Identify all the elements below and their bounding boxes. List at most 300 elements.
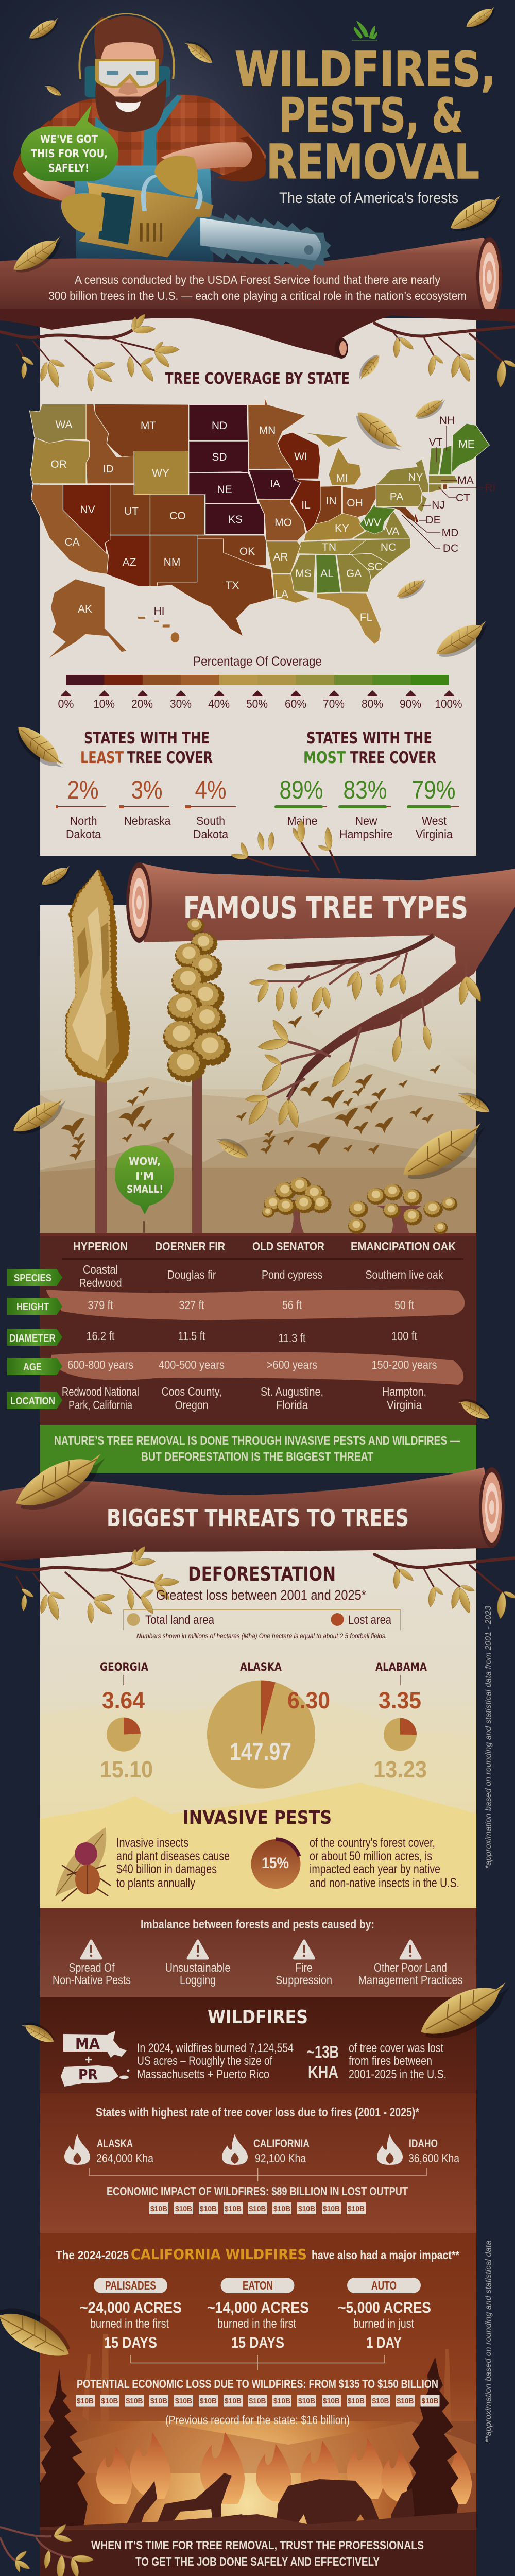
- $10B tiles: $10B: [348, 2205, 365, 2213]
- speech bubble: we've got this: [21, 105, 118, 181]
- column headers: EMANCIPATION OAK: [351, 1240, 456, 1253]
- panel: California wildfires: [40, 2233, 476, 2532]
- map state labels: SD: [212, 451, 227, 463]
- icon: leaf: [454, 1087, 493, 1117]
- map state labels: MT: [141, 420, 156, 432]
- icon: leaf: [8, 231, 69, 280]
- mountain layers: [40, 1026, 476, 1233]
- nose: [118, 83, 138, 95]
- tree: Hyperion: [67, 872, 128, 1233]
- state names: Dakota: [193, 827, 228, 841]
- log underside branches: [0, 309, 515, 358]
- icon: leaf: [350, 405, 408, 460]
- fire pill: Eaton: EATON: [243, 2279, 273, 2292]
- map state labels: MN: [259, 425, 276, 436]
- icon: leaf: [394, 574, 430, 603]
- fire pill: Palisades: PALISADES: [105, 2279, 156, 2292]
- chain teeth: [210, 213, 331, 271]
- icon: plant logo: [352, 21, 377, 40]
- map state labels: MO: [274, 517, 292, 529]
- $10B tiles: $10B: [77, 2397, 94, 2405]
- stat values: 2%: [67, 775, 99, 804]
- map outside labels: [153, 415, 495, 617]
- tree cover lost text: of tree cover was lost: [349, 2041, 443, 2055]
- twigs above log: [231, 820, 340, 873]
- states heading: States with highest rate of tree cover loss due to fires (2001 - 2025)*: [96, 2106, 420, 2120]
- table cells: Coastal: [83, 1263, 118, 1276]
- panel: imbalance causes: [40, 1908, 476, 1997]
- speech bubble: wow, I'm small: I'M: [135, 1170, 154, 1182]
- state names: New: [355, 814, 377, 827]
- map state labels: IL: [301, 499, 311, 511]
- heading: least: STATES WITH THE: [84, 729, 210, 748]
- panel: states with highest loss: [40, 2093, 476, 2233]
- legend tick labels: 60%: [285, 697, 306, 710]
- map outside labels: HI: [153, 605, 165, 617]
- stat values: 83%: [343, 775, 387, 804]
- wildfire acreage text: US acres – Roughly the size of: [137, 2054, 272, 2068]
- text: invasive insects: to plants annually: [116, 1876, 195, 1890]
- cause labels: Spread Of: [69, 1961, 115, 1974]
- table cells: 100 ft: [391, 1329, 418, 1343]
- title: [235, 42, 496, 190]
- fire acreage stats: 15 DAYS: [104, 2334, 157, 2351]
- map outside labels: DC: [443, 543, 458, 554]
- fire pill: Eaton: [220, 2278, 295, 2293]
- table cells: [62, 1263, 443, 1412]
- imbalance heading: Imbalance between forests and pests caused by:: [141, 1918, 374, 1931]
- map state labels: WY: [152, 467, 169, 479]
- table cells: Redwood National: [62, 1385, 139, 1398]
- most tree cover stats: [276, 729, 459, 841]
- least tree cover stats: [56, 729, 236, 841]
- map leader lines: [402, 426, 485, 548]
- icon: leaf: [39, 862, 75, 890]
- map outside labels: MD: [442, 527, 458, 539]
- shirt plaid: [49, 95, 266, 197]
- twig at left of log: [0, 2523, 94, 2576]
- table cells: 400-500 years: [159, 1358, 225, 1371]
- legend tick labels: 30%: [170, 697, 192, 710]
- fire pill: Auto: AUTO: [371, 2279, 397, 2292]
- hair: [94, 16, 164, 65]
- map state labels: WI: [294, 451, 307, 463]
- map state labels: IN: [325, 495, 337, 507]
- icon: leaf: [445, 189, 509, 239]
- mouth: [116, 101, 141, 112]
- text: invasive insects: and plant diseases cause: [116, 1849, 230, 1863]
- $10B tiles: $10B: [249, 2397, 266, 2405]
- text: invasive insects: Invasive insects: [116, 1836, 188, 1850]
- legend tick labels: 80%: [362, 697, 383, 710]
- goggles: [97, 60, 157, 87]
- table cells: Hampton,: [382, 1385, 426, 1398]
- map outside labels: DE: [425, 514, 441, 526]
- left twigs: [0, 1545, 179, 1623]
- icon: leaf: [431, 615, 495, 665]
- $10B tiles: $10B: [150, 2205, 167, 2213]
- text: forest cover: and non-native insects in the U.S.: [310, 1876, 459, 1890]
- log title: BIGGEST THREATS TO TREES: [107, 1504, 409, 1532]
- map state labels: NY: [408, 471, 423, 483]
- pie: Georgia: 3.64: [102, 1687, 145, 1714]
- map state labels: GA: [346, 568, 362, 580]
- map state labels: AK: [78, 603, 92, 615]
- faint background trees: [82, 2334, 451, 2432]
- table cells: Virginia: [387, 1398, 422, 1412]
- column headers: HYPERION: [73, 1240, 128, 1253]
- table background: [40, 1236, 476, 1425]
- row tags: DIAMETER: [9, 1333, 56, 1344]
- branch cut end: [335, 338, 348, 359]
- footnote: approximation: **approximation based on rounding and statistical data: [484, 2241, 493, 2443]
- elk: [154, 2473, 232, 2530]
- legend tick labels: 40%: [208, 697, 230, 710]
- title: REMOVAL: [266, 134, 479, 190]
- $10B tiles: $10B: [323, 2397, 340, 2405]
- tree: Old Senator: [263, 1178, 331, 1233]
- intro text: [48, 273, 467, 302]
- map state labels: NE: [217, 484, 232, 496]
- row tags: LOCATION: [10, 1396, 55, 1407]
- table cells: 379 ft: [88, 1298, 113, 1312]
- most tree cover stats: TREE COVER: [350, 749, 436, 767]
- left forearm: [23, 167, 82, 203]
- saw vents: [141, 223, 161, 242]
- flame icons: [64, 2134, 403, 2165]
- callout: trust the professionals: TO GET THE JOB DONE SAFELY AND EFFECTIVELY: [135, 2555, 380, 2568]
- background hills: [40, 1700, 476, 1908]
- row tags: [7, 1269, 62, 1409]
- map outside labels: MA: [457, 474, 474, 486]
- stat values: [279, 775, 455, 804]
- $10B tiles: $10B: [372, 2397, 389, 2405]
- log cut end: [476, 237, 502, 317]
- face: [98, 42, 158, 98]
- $10B tiles: $10B: [175, 2397, 192, 2405]
- pie: Alabama: [373, 1661, 427, 1783]
- $10B tiles: $10B: [348, 2397, 365, 2405]
- warning icons: [81, 1941, 420, 1958]
- bubble text: WOW,: [129, 1155, 161, 1167]
- map state labels: ND: [212, 420, 227, 432]
- deer: [124, 2481, 157, 2530]
- column headers: OLD SENATOR: [252, 1240, 324, 1253]
- section heading: tree coverage: TREE COVERAGE BY STATE: [165, 370, 350, 388]
- table cells: 50 ft: [394, 1298, 415, 1312]
- stat: 13B kha: [307, 2042, 339, 2081]
- map state labels: CA: [64, 536, 80, 548]
- shirt: [49, 95, 266, 197]
- $10B tiles: $10B: [421, 2397, 439, 2405]
- heading: most: STATES WITH THE: [306, 729, 432, 748]
- icon: leaf: [414, 1972, 515, 2050]
- pie: Alaska: 6.30: [287, 1687, 330, 1714]
- icon: leaf: [354, 351, 383, 383]
- pie: Alaska: [207, 1661, 330, 1789]
- tiny person for scale: [143, 1221, 145, 1233]
- cause labels: Unsustainable: [165, 1961, 231, 1974]
- legend ticks: [60, 690, 455, 696]
- table cells: 56 ft: [282, 1298, 302, 1312]
- $10B tiles: $10B: [126, 2397, 143, 2405]
- guide bar: [200, 218, 321, 261]
- icon: leaf: [8, 1092, 72, 1142]
- tree cover lost text: from fires between: [349, 2054, 432, 2068]
- table cells: 16.2 ft: [87, 1329, 115, 1343]
- cause labels: Other Poor Land: [374, 1961, 447, 1974]
- legend colour bar: [66, 675, 449, 685]
- choropleth map of US states: [29, 397, 489, 658]
- state names: North: [70, 814, 97, 827]
- legend tick labels: 20%: [131, 697, 153, 710]
- previous record note: (Previous record for the state: $16 billion): [165, 2413, 350, 2427]
- map state labels: AL: [320, 568, 334, 580]
- bracket: [89, 2168, 426, 2181]
- fire acreage stats: ~5,000 ACRES: [338, 2299, 431, 2316]
- tree cover lost text: [349, 2041, 447, 2081]
- icon: leaf: [10, 720, 70, 777]
- map state labels: AR: [273, 551, 288, 563]
- fire acreage stats: [80, 2299, 431, 2351]
- table cells: Oregon: [175, 1398, 208, 1412]
- row tags: AGE: [23, 1362, 42, 1373]
- $10B tiles: $10B: [298, 2397, 315, 2405]
- icon: leaf: [454, 1393, 493, 1423]
- cause labels: Non-Native Pests: [53, 1973, 131, 1987]
- birds: [61, 1010, 440, 1161]
- tree cover lost text: 2001-2025 in the U.S.: [349, 2067, 447, 2081]
- $10B tiles: $10B: [200, 2397, 217, 2405]
- $10B tiles: $10B: [298, 2205, 315, 2213]
- donut stat: 15%: [251, 1839, 301, 1889]
- ground line: [40, 1233, 476, 1237]
- fire acreage stats: ~14,000 ACRES: [207, 2299, 309, 2316]
- right forearm: [161, 142, 255, 170]
- text: forest cover: [310, 1836, 459, 1890]
- table cells: Southern live oak: [366, 1268, 443, 1281]
- panel: famous tree types scene: [40, 905, 476, 1233]
- fire acreage stats: 1 DAY: [366, 2334, 402, 2351]
- callout: trust the professionals: WHEN IT’S TIME FOR TREE REMOVAL, TRUST THE PROFESSIONALS: [91, 2538, 424, 2552]
- map state labels: MI: [336, 472, 348, 484]
- map state labels: UT: [124, 505, 139, 517]
- right twigs: [374, 323, 515, 388]
- map state labels: OR: [50, 459, 67, 470]
- icon: leaf: [43, 81, 63, 98]
- bubble text: WE'VE GOT: [40, 133, 98, 145]
- map state labels: NM: [164, 556, 180, 568]
- bar sprocket: [304, 245, 313, 255]
- table cells: Pond cypress: [262, 1268, 322, 1281]
- log and big branch: [140, 862, 515, 1097]
- $10B tiles: $10B: [175, 2205, 192, 2213]
- bubble tail: [72, 105, 99, 130]
- map state labels: [50, 419, 475, 623]
- tree: Emancipation Oak: [349, 1185, 457, 1233]
- legend tick labels: 10%: [93, 697, 115, 710]
- bubble body: [21, 126, 118, 181]
- table cells: >600 years: [267, 1358, 317, 1371]
- pie: Alaska: ALASKA: [240, 1661, 282, 1674]
- state names: South: [196, 814, 225, 827]
- saw handle: [143, 176, 200, 211]
- wildfire acreage text: In 2024, wildfires burned 7,124,554: [137, 2041, 294, 2055]
- icon: leaf: [9, 1443, 114, 1522]
- $10B tiles: $10B: [273, 2397, 290, 2405]
- least tree cover stats: TREE COVER: [127, 749, 213, 767]
- map outside labels: NJ: [432, 499, 445, 511]
- fire scene backdrop: [40, 2421, 476, 2532]
- left twigs: [0, 312, 179, 391]
- map state labels: OK: [239, 546, 255, 557]
- stat values: 79%: [412, 775, 455, 804]
- table highlight bands: [46, 1290, 465, 1320]
- map outside labels: VT: [429, 436, 443, 448]
- branch sub-limbs and leaves: [245, 935, 485, 1129]
- icon: leaf: [181, 36, 216, 67]
- stat values: [67, 775, 227, 804]
- economic impact heading: ECONOMIC IMPACT OF WILDFIRES: $89 BILLION IN LOST OUTPUT: [107, 2184, 408, 2198]
- hero: lumberjack illustration: [13, 14, 266, 264]
- icon: leaf: [26, 14, 64, 44]
- right twigs: [374, 1554, 515, 1619]
- stat: 13B kha: ~13B: [307, 2042, 339, 2061]
- pie: Georgia: [100, 1661, 153, 1783]
- pie: Alabama: 13.23: [373, 1756, 427, 1783]
- legend tick labels: [58, 697, 462, 710]
- table cells: 11.5 ft: [178, 1329, 205, 1343]
- map outside labels: CT: [456, 492, 470, 504]
- $10B tiles: $10B: [225, 2205, 242, 2213]
- icon: beetle on leaf: [56, 1827, 111, 1901]
- text: forest cover: of the country's forest cover,: [310, 1836, 435, 1850]
- log cut end: [126, 862, 152, 943]
- map state labels: WV: [364, 517, 381, 529]
- overalls bib: [75, 165, 214, 264]
- bracket: [131, 2355, 384, 2370]
- speech bubble: wow, I'm small: [115, 1145, 174, 1214]
- saw body: [79, 182, 214, 257]
- legend title: Percentage Of Coverage: [193, 654, 322, 669]
- $10B tiles: [76, 2395, 440, 2407]
- $10B tiles: $10B: [273, 2205, 290, 2213]
- cause labels: Fire: [296, 1961, 312, 1974]
- state loss labels: 264,000 Kha: [96, 2151, 153, 2165]
- invasive pests heading: INVASIVE PESTS: [183, 1807, 332, 1828]
- pie: Alabama: 3.35: [379, 1687, 421, 1714]
- table cells: St. Augustine,: [261, 1385, 323, 1398]
- map state labels: ID: [103, 463, 113, 475]
- pie: Georgia: GEORGIA: [100, 1661, 148, 1674]
- map outside labels: RI: [485, 482, 495, 494]
- donut stat: 15%: 15%: [262, 1855, 289, 1872]
- icon: Massachusetts: [63, 2031, 127, 2058]
- map state labels: AZ: [123, 556, 136, 568]
- map state labels: OH: [347, 497, 363, 509]
- fire acreage stats: 15 DAYS: [231, 2334, 284, 2351]
- map state labels: KY: [335, 522, 349, 534]
- state loss labels: IDAHO: [409, 2137, 438, 2150]
- table header rule: [62, 1258, 464, 1260]
- map state labels: NV: [80, 504, 95, 516]
- gloves: [61, 156, 198, 233]
- state loss labels: [96, 2137, 459, 2165]
- legend: percentage of coverage: [58, 654, 462, 710]
- log heading: famous tree types: [126, 862, 515, 1097]
- log heading: biggest threats: [0, 1467, 505, 1561]
- pie: Alaska: 147.97: [230, 1738, 291, 1765]
- intro text: A census conducted by the USDA Forest Service found that there are nearly: [75, 273, 440, 286]
- flames: [96, 2432, 472, 2504]
- state loss labels: 36,600 Kha: [408, 2151, 459, 2165]
- eyes: [107, 71, 148, 75]
- $10B tiles: [149, 2202, 366, 2214]
- icon: leaf: [213, 1132, 252, 1163]
- stat values: 3%: [131, 775, 163, 804]
- fire acreage stats: burned in the first: [90, 2317, 169, 2331]
- beard: [95, 79, 166, 132]
- california intro line: have also had a major impact**: [312, 2248, 459, 2262]
- state loss labels: 92,100 Kha: [255, 2151, 306, 2165]
- table cells: Douglas fir: [167, 1268, 216, 1281]
- stat bars: [276, 806, 459, 807]
- map state labels: TN: [322, 541, 336, 553]
- state names: Maine: [287, 814, 317, 827]
- legend tick labels: 100%: [435, 697, 462, 710]
- panel: wildfires: [40, 1997, 476, 2093]
- fire pill: Palisades: [94, 2278, 167, 2293]
- wolf: [391, 2488, 415, 2530]
- map state labels: KS: [228, 514, 243, 526]
- tree: Doerner Fir: [165, 919, 229, 1233]
- state names: Nebraska: [124, 814, 171, 827]
- map state labels: VA: [386, 526, 399, 537]
- headphone band: [79, 14, 174, 79]
- plus sign: +: [85, 2053, 92, 2067]
- icon: Puerto Rico: [61, 2065, 130, 2087]
- map state labels: ME: [458, 438, 475, 450]
- background glow: [0, 0, 515, 371]
- icon: leaf: [0, 2294, 78, 2367]
- table cells: Florida: [276, 1398, 308, 1412]
- speech bubble: we've got this: SAFELY!: [48, 162, 89, 174]
- scene foreground ground: [40, 2512, 476, 2532]
- stat: 13B kha: KHA: [308, 2062, 338, 2081]
- log body: [0, 1467, 494, 1561]
- subtitle: The state of America's forests: [279, 190, 458, 207]
- map state labels: WA: [55, 419, 73, 431]
- legend tick labels: 90%: [400, 697, 421, 710]
- overall straps: [94, 95, 182, 165]
- state loss labels: CALIFORNIA: [253, 2137, 310, 2150]
- callout: trust the professionals: [40, 2530, 476, 2576]
- cub: [216, 2514, 247, 2530]
- $10B tiles: $10B: [101, 2397, 118, 2405]
- stat bars: [56, 806, 236, 807]
- map state labels: MS: [295, 568, 312, 580]
- california intro line: [56, 2246, 459, 2263]
- $10B tiles: $10B: [200, 2205, 217, 2213]
- earmuffs: [85, 66, 170, 97]
- california intro line: CALIFORNIA WILDFIRES: [131, 2246, 307, 2263]
- map state labels: FL: [360, 612, 372, 623]
- text: invasive insects: [116, 1836, 230, 1890]
- fire acreage stats: ~24,000 ACRES: [80, 2299, 182, 2316]
- map state labels: CO: [169, 510, 186, 522]
- log body: [0, 238, 494, 320]
- fire acreage stats: burned in just: [353, 2317, 414, 2331]
